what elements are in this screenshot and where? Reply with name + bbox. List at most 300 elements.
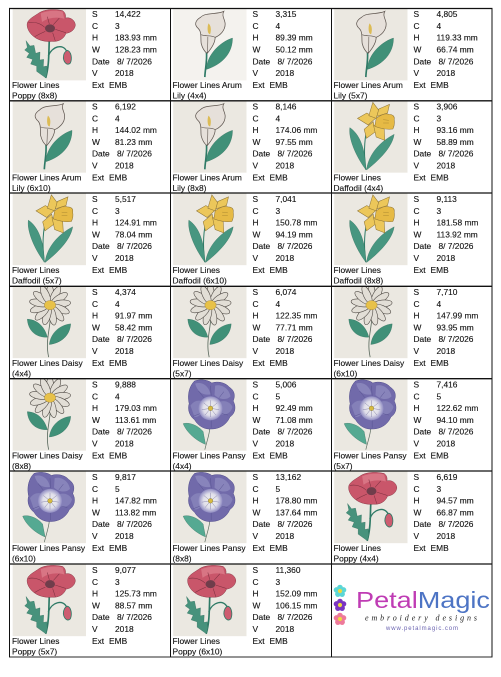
stats: EMB — [109, 450, 128, 460]
stats — [252, 472, 317, 553]
stats: S — [92, 472, 98, 482]
stats: EMB — [270, 636, 288, 646]
icon: lily flower — [13, 101, 86, 173]
stats: W — [414, 415, 422, 425]
stats: 78.04 mm — [115, 229, 152, 239]
stats: 181.58 mm — [436, 218, 478, 228]
stats: 58.42 mm — [115, 322, 152, 332]
name — [12, 450, 84, 471]
stats — [414, 472, 474, 553]
stats: V — [92, 624, 98, 634]
stats: 9,113 — [436, 194, 457, 204]
stats: Ext — [252, 636, 265, 646]
stats: V — [414, 160, 420, 170]
stats: W — [252, 600, 260, 610]
stats: Ext — [92, 80, 105, 90]
stats: 4 — [436, 21, 442, 31]
icon: poppy flower — [13, 9, 86, 80]
name: Lily (4x4) — [172, 91, 207, 101]
stats: V — [92, 253, 98, 263]
stats: 97.55 mm — [276, 137, 313, 147]
stats: S — [92, 102, 98, 112]
stats: 8,146 — [276, 102, 297, 112]
stats — [414, 9, 478, 90]
stats: Ext — [414, 358, 426, 368]
icon: lily flower — [173, 9, 246, 80]
stats: C — [92, 206, 98, 216]
stats: 113.82 mm — [115, 507, 156, 517]
stats: 179.03 mm — [115, 403, 157, 413]
stats: 6,074 — [276, 287, 297, 297]
stats: Ext — [414, 80, 426, 90]
stats: H — [414, 310, 420, 320]
stats: H — [252, 125, 259, 135]
stats: C — [414, 113, 420, 123]
stats: W — [414, 507, 422, 517]
stats: Date — [414, 334, 432, 344]
stats: 7,041 — [276, 194, 297, 204]
stats: 71.08 mm — [276, 415, 313, 425]
cell: Poppy 4x4 — [334, 472, 474, 563]
stats: 2018 — [436, 253, 455, 263]
stats: EMB — [430, 450, 449, 460]
name — [334, 265, 383, 285]
stats: V — [414, 68, 420, 78]
stats: EMB — [430, 358, 449, 368]
stats: 8/ 7/2026 — [117, 612, 152, 622]
stats: H — [92, 496, 98, 506]
stats: V — [92, 160, 98, 170]
name: Flower Lines Arum — [172, 80, 242, 90]
stats: 94.57 mm — [436, 496, 474, 506]
icon: daisy flower — [13, 284, 86, 358]
stats: C — [92, 391, 98, 401]
stats: V — [92, 438, 98, 448]
icon: daffodil flower — [13, 194, 86, 265]
name — [172, 265, 227, 285]
cell: Poppy 6x10 — [172, 564, 317, 656]
stats: 3 — [436, 484, 442, 494]
cell: Poppy 8x8 — [12, 9, 157, 101]
stats: Ext — [92, 450, 105, 460]
stats: 11,360 — [276, 565, 301, 575]
stats — [252, 287, 317, 368]
icon: lily flower — [334, 9, 408, 80]
name — [12, 358, 84, 378]
stats: 14,422 — [115, 9, 141, 19]
name: Flower Lines — [12, 265, 59, 275]
stats: Date — [92, 612, 110, 622]
icon: poppy flower — [13, 564, 86, 636]
name — [12, 265, 62, 285]
stats: C — [414, 299, 420, 309]
stats: C — [252, 299, 259, 309]
stats: 106.15 mm — [276, 600, 317, 610]
stats: 91.97 mm — [115, 310, 152, 320]
stats: 2018 — [276, 346, 294, 356]
stats: Date — [414, 56, 432, 66]
stats: 2018 — [436, 346, 455, 356]
stats: 125.73 mm — [115, 588, 157, 598]
stats — [92, 102, 157, 182]
stats: Date — [92, 334, 110, 344]
name: Poppy (6x10) — [172, 646, 223, 656]
stats: EMB — [430, 543, 449, 553]
icon: pansy flower — [334, 379, 408, 451]
stats: H — [414, 33, 420, 43]
stats: V — [252, 346, 258, 356]
stats: H — [252, 310, 259, 320]
stats: 2018 — [115, 624, 134, 634]
icon: daffodil flower — [173, 194, 246, 265]
stats: 2018 — [276, 438, 294, 448]
stats: 2018 — [115, 531, 134, 541]
name: Flower Lines — [172, 265, 220, 275]
stats: EMB — [109, 636, 128, 646]
stats: 8/ 7/2026 — [117, 56, 152, 66]
cell: Pansy 8x8 — [172, 472, 317, 563]
cell: Pansy 6x10 — [12, 472, 157, 563]
stats: Date — [414, 241, 432, 251]
name: Lily (8x8) — [172, 183, 207, 193]
name: Flower Lines Arum — [334, 80, 403, 90]
stats: C — [92, 577, 98, 587]
stats: 4 — [115, 113, 120, 123]
stats: 77.71 mm — [276, 322, 313, 332]
name: Poppy (4x4) — [334, 553, 379, 563]
stats: 2018 — [276, 253, 294, 263]
stats: Ext — [414, 172, 426, 182]
stats — [92, 287, 152, 368]
icon: pansy flower — [173, 379, 246, 451]
name: Flower Lines Daisy — [172, 358, 244, 368]
stats: S — [414, 102, 420, 112]
stats: 8/ 7/2026 — [438, 519, 474, 529]
stats: 3,906 — [436, 102, 458, 112]
stats: 7,416 — [436, 380, 458, 390]
name: (6x10) — [334, 368, 357, 378]
stats: H — [252, 403, 259, 413]
name — [334, 358, 405, 378]
stats: W — [92, 415, 100, 425]
logo: PetalMagic — [334, 585, 490, 632]
stats: H — [252, 218, 259, 228]
stats: 50.12 mm — [276, 44, 313, 54]
name: (5x7) — [334, 461, 353, 471]
stats: 144.02 mm — [115, 125, 157, 135]
name: Flower Lines — [334, 543, 381, 553]
name — [12, 543, 86, 563]
icon: poppy flower — [173, 564, 246, 636]
stats: C — [252, 113, 259, 123]
stats: 88.57 mm — [115, 600, 152, 610]
stats: 4,374 — [115, 287, 136, 297]
stats: V — [252, 438, 258, 448]
stats: C — [92, 299, 98, 309]
stats: 8/ 7/2026 — [117, 427, 152, 437]
stats — [252, 380, 313, 460]
stats: W — [92, 507, 100, 517]
name: Poppy (5x7) — [12, 646, 57, 656]
stats: 147.82 mm — [115, 496, 157, 506]
stats: S — [92, 287, 98, 297]
stats: 7,710 — [436, 287, 458, 297]
stats: 4 — [436, 299, 442, 309]
stats: C — [414, 206, 420, 216]
stats: Ext — [92, 172, 105, 182]
stats: 5,006 — [276, 380, 297, 390]
stats: 5 — [276, 391, 280, 401]
stats: W — [414, 322, 422, 332]
stats: 2018 — [436, 68, 455, 78]
name: Flower Lines — [12, 636, 59, 646]
stats — [252, 9, 313, 90]
stats: C — [414, 484, 420, 494]
stats: V — [414, 438, 420, 448]
name: Flower Lines — [334, 172, 381, 182]
stats: EMB — [270, 80, 288, 90]
stats: H — [92, 588, 98, 598]
stats: 9,888 — [115, 380, 136, 390]
logo url: www.petalmagic.com — [385, 626, 458, 632]
name — [172, 543, 246, 563]
stats: Ext — [414, 543, 426, 553]
stats: S — [92, 9, 98, 19]
stats: C — [252, 21, 259, 31]
stats: V — [252, 531, 258, 541]
stats: V — [252, 160, 258, 170]
stats: 9,077 — [115, 565, 136, 575]
cell: Daffodil 6x10 — [172, 194, 317, 285]
stats: 4 — [276, 299, 280, 309]
stats: Date — [92, 427, 110, 437]
stats: W — [414, 137, 422, 147]
name: (6x10) — [12, 553, 36, 563]
stats: 4 — [276, 21, 280, 31]
name — [172, 172, 242, 193]
stats: 3 — [276, 577, 280, 587]
cell: Arum Lily 5x7 — [334, 9, 478, 101]
stats: Date — [252, 427, 271, 437]
stats: 4 — [276, 113, 280, 123]
stats: W — [92, 322, 100, 332]
name: Flower Lines — [12, 80, 59, 90]
stats: EMB — [430, 80, 449, 90]
stats: 8/ 7/2026 — [438, 334, 474, 344]
stats: W — [252, 137, 260, 147]
stats: H — [92, 125, 98, 135]
stats: V — [92, 346, 98, 356]
name: Lily (6x10) — [12, 183, 51, 193]
stats: 122.62 mm — [436, 403, 478, 413]
name — [12, 80, 59, 100]
name: (4x4) — [172, 461, 192, 471]
stats: 9,817 — [115, 472, 136, 482]
stats — [92, 194, 157, 275]
stats: C — [252, 391, 259, 401]
name: (5x7) — [172, 368, 192, 378]
stats: 66.74 mm — [436, 44, 474, 54]
name: Flower Lines Daisy — [12, 450, 84, 460]
stats: S — [252, 287, 258, 297]
stats: 4 — [115, 299, 120, 309]
stats: 3 — [115, 577, 120, 587]
name — [12, 172, 81, 193]
stats: 2018 — [115, 253, 134, 263]
stats — [92, 9, 157, 90]
stats: Ext — [414, 265, 426, 275]
stats: S — [414, 287, 420, 297]
stats: EMB — [430, 172, 449, 182]
stats: Date — [252, 56, 271, 66]
name: (4x4) — [12, 368, 31, 378]
stats: W — [252, 44, 260, 54]
stats: 8/ 7/2026 — [117, 149, 152, 159]
stats: 2018 — [115, 160, 134, 170]
stats: 8/ 7/2026 — [278, 334, 313, 344]
stats: 150.78 mm — [276, 218, 317, 228]
stats: 119.33 mm — [436, 33, 478, 43]
icon: poppy flower — [334, 472, 408, 543]
stats: Ext — [252, 543, 265, 553]
stats: S — [252, 102, 258, 112]
logo wordmark: Petal Magic — [356, 587, 490, 613]
stats: Date — [414, 519, 432, 529]
stats: S — [252, 194, 258, 204]
stats: 178.80 mm — [276, 496, 317, 506]
stats: 8/ 7/2026 — [278, 427, 313, 437]
stats: V — [414, 253, 420, 263]
stats: V — [414, 531, 420, 541]
stats: S — [414, 380, 420, 390]
name — [334, 450, 407, 471]
stats — [252, 194, 317, 275]
name: (8x8) — [172, 553, 192, 563]
stats — [414, 287, 478, 368]
icon: pansy flower — [13, 472, 86, 543]
stats: EMB — [109, 358, 128, 368]
icon: purple flower — [334, 599, 346, 611]
stats — [252, 565, 317, 646]
stats: 8/ 7/2026 — [438, 56, 474, 66]
stats: 8/ 7/2026 — [117, 334, 152, 344]
stats: 5,517 — [115, 194, 136, 204]
stats: H — [414, 403, 420, 413]
stats: Ext — [252, 265, 265, 275]
name: Flower Lines Pansy — [172, 543, 246, 553]
stats: 183.93 mm — [115, 33, 157, 43]
name: Daffodil (6x10) — [172, 275, 227, 285]
icon: blue flower — [334, 585, 346, 597]
stats: 8/ 7/2026 — [438, 149, 474, 159]
stats — [252, 102, 317, 182]
stats: 8/ 7/2026 — [278, 56, 313, 66]
stats: H — [92, 403, 98, 413]
stats: 66.87 mm — [436, 507, 474, 517]
stats: H — [92, 218, 98, 228]
stats: H — [92, 310, 98, 320]
stats: S — [92, 565, 98, 575]
stats: H — [414, 496, 420, 506]
stats: 2018 — [276, 160, 294, 170]
stats: Ext — [252, 80, 265, 90]
name — [334, 172, 383, 193]
name — [172, 358, 244, 378]
name: Flower Lines Arum — [172, 172, 242, 182]
stats: 8/ 7/2026 — [278, 519, 313, 529]
stats: 93.95 mm — [436, 322, 474, 332]
name: Daffodil (8x8) — [334, 275, 383, 285]
stats: Date — [252, 612, 271, 622]
stats: 8/ 7/2026 — [117, 519, 152, 529]
stats: Date — [92, 241, 110, 251]
name: Flower Lines Pansy — [334, 450, 407, 460]
logo tagline: embroidery designs — [365, 614, 477, 622]
stats: EMB — [270, 543, 288, 553]
stats: W — [252, 322, 260, 332]
name: Flower Lines Pansy — [172, 450, 246, 460]
name: (8x8) — [12, 461, 31, 471]
stats: EMB — [109, 80, 128, 90]
cell: Arum Lily 8x8 — [172, 101, 317, 193]
cell: Pansy 5x7 — [334, 379, 478, 471]
stats: V — [92, 68, 98, 78]
icon: lily flower — [173, 101, 246, 173]
stats: 5 — [115, 484, 120, 494]
stats: 3 — [276, 206, 280, 216]
stats: W — [252, 507, 260, 517]
stats: W — [252, 415, 260, 425]
stats: 124.91 mm — [115, 218, 157, 228]
stats: Ext — [92, 358, 105, 368]
name: Flower Lines Pansy — [12, 543, 86, 553]
stats: C — [414, 21, 420, 31]
stats: 152.09 mm — [276, 588, 317, 598]
cell: Arum Lily 6x10 — [12, 101, 157, 193]
stats: Date — [252, 241, 271, 251]
icon: daffodil flower — [334, 101, 408, 173]
name: Flower Lines Daisy — [12, 358, 84, 368]
icon: daisy flower — [334, 284, 408, 358]
stats: EMB — [270, 172, 288, 182]
stats: 6,619 — [436, 472, 458, 482]
name — [12, 636, 59, 656]
stats: EMB — [109, 265, 128, 275]
stats — [414, 194, 478, 275]
stats: V — [92, 531, 98, 541]
stats: H — [252, 33, 259, 43]
stats: EMB — [109, 172, 128, 182]
stats: V — [252, 68, 258, 78]
stats: S — [414, 9, 420, 19]
name — [334, 80, 403, 100]
stats: S — [92, 194, 98, 204]
cell: Daisy 5x7 — [172, 284, 317, 378]
stats: 13,162 — [276, 472, 301, 482]
stats: H — [414, 218, 420, 228]
icon: daisy flower — [173, 284, 246, 358]
stats: C — [252, 206, 259, 216]
stats: S — [414, 472, 420, 482]
cell: Daffodil 4x4 — [334, 101, 474, 193]
stats: 8/ 7/2026 — [278, 149, 313, 159]
stats: 81.23 mm — [115, 137, 152, 147]
stats: Date — [252, 334, 271, 344]
stats: 58.89 mm — [436, 137, 474, 147]
stats: 113.92 mm — [436, 229, 478, 239]
stats — [92, 380, 157, 460]
stats: 2018 — [115, 438, 134, 448]
